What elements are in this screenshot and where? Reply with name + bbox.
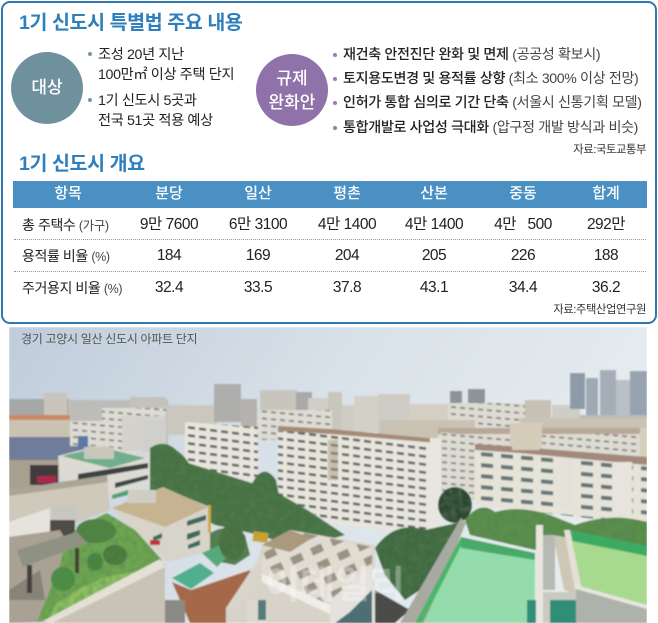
row: total housing: 4만 500 [494, 216, 552, 233]
photo: Ilsan new town apartments [9, 327, 647, 623]
column heading: Jungdong: 중동 [509, 185, 537, 202]
row: floor area ratio: 용적률 비율 (%) [22, 248, 110, 264]
row: floor area ratio: 205 [422, 247, 446, 264]
street [372, 590, 410, 623]
row: floor area ratio: 226 [511, 247, 535, 264]
bullet list: deregulation: 토지용도변경 및 용적률 상향 (최소 300% 이상 전망) [343, 70, 638, 86]
badge: target: 대상 [31, 78, 63, 97]
sky [9, 327, 647, 623]
bullet list: deregulation [333, 46, 642, 135]
right green rooftop [564, 530, 647, 623]
mid distance apartments [102, 408, 647, 491]
bullet list: deregulation: 통합개발로 사업성 극대화 (압구정 개발 방식과 비슷) [343, 119, 638, 135]
concrete stair core [536, 525, 578, 623]
heading: special act: 1기 신도시 특별법 주요 내용 [19, 12, 242, 34]
row: total housing: 6만 3100 [229, 216, 287, 233]
foreground building [43, 561, 165, 623]
badge: deregulation [256, 54, 328, 126]
row: floor area ratio: 184 [157, 247, 181, 264]
row: residential land ratio: 43.1 [420, 279, 448, 296]
badge: deregulation: 완화안 [269, 93, 315, 112]
bullet list: deregulation: 재건축 안전진단 완화 및 면제 (공공성 확보시) [343, 46, 600, 62]
small green roofs [165, 524, 255, 623]
table header [13, 181, 647, 208]
row: floor area ratio: 188 [594, 247, 618, 264]
left building with blue facade [9, 415, 102, 490]
right hand trees [375, 487, 647, 600]
white lattice rooftop building [226, 530, 375, 623]
column heading: Pyeongchon: 평촌 [333, 185, 361, 202]
badge: target [11, 52, 83, 124]
rooftop garden [37, 513, 162, 622]
green rooftop [400, 518, 537, 623]
long right apartment block [441, 432, 475, 500]
row: total housing: 총 주택수 (가구) [22, 217, 109, 233]
source: housing institute: 자료:주택산업연구원 [553, 304, 646, 316]
large white apartment block [277, 430, 430, 532]
row: residential land ratio [22, 279, 620, 296]
heading: overview: 1기 신도시 개요 [19, 153, 145, 175]
green roof building [58, 445, 150, 499]
row: total housing [22, 216, 625, 233]
bullet list: target: 1기 신도시 5곳과 [98, 93, 196, 109]
table: overview [13, 181, 647, 208]
row: floor area ratio: 204 [335, 247, 359, 264]
source: ministry: 자료:국토교통부 [573, 144, 646, 156]
bullet list: target: 조성 20년 지난 [98, 47, 184, 63]
row: residential land ratio: 32.4 [155, 279, 183, 296]
column heading: Sanbon: 산본 [420, 185, 448, 202]
pergola [17, 532, 87, 593]
bullet list: deregulation: 인허가 통합 심의로 기간 단축 (서울시 신통기획 모델) [343, 94, 642, 110]
row: total housing: 292만 [587, 216, 625, 233]
row: residential land ratio: 36.2 [592, 279, 620, 296]
column heading: item: 항목 [54, 185, 82, 202]
column heading: Ilsan: 일산 [244, 185, 272, 202]
bullet list: target: 전국 51곳 적용 예상 [98, 113, 213, 129]
row: residential land ratio: 34.4 [509, 279, 537, 296]
trees behind [150, 444, 345, 548]
photo caption: 경기 고양시 일산 신도시 아파트 단지 [21, 332, 197, 346]
row: residential land ratio: 33.5 [244, 279, 272, 296]
row: residential land ratio: 주거용지 비율 (%) [22, 280, 122, 296]
row: total housing: 4만 1400 [405, 216, 463, 233]
yellow bus [252, 531, 269, 543]
bullet list: target: 100만㎡ 이상 주택 단지 [98, 67, 234, 83]
bullet list: target [88, 47, 234, 129]
column heading: Bundang: 분당 [155, 185, 183, 202]
row: total housing: 4만 1400 [318, 216, 376, 233]
white apartment block [185, 422, 258, 483]
badge: deregulation: 규제 [276, 69, 308, 88]
row: residential land ratio: 37.8 [333, 279, 361, 296]
tan rooftop building [112, 487, 211, 562]
column heading: total: 합계 [592, 185, 620, 202]
far skyline [9, 370, 647, 450]
panel: summary [1, 1, 657, 324]
watermark: 이데일리 [265, 565, 405, 607]
street trees center [176, 450, 280, 494]
concrete building left [9, 475, 110, 540]
left ground level [9, 529, 64, 623]
row: total housing: 9만 7600 [140, 216, 198, 233]
row: floor area ratio: 169 [246, 247, 270, 264]
row: floor area ratio [22, 247, 618, 264]
